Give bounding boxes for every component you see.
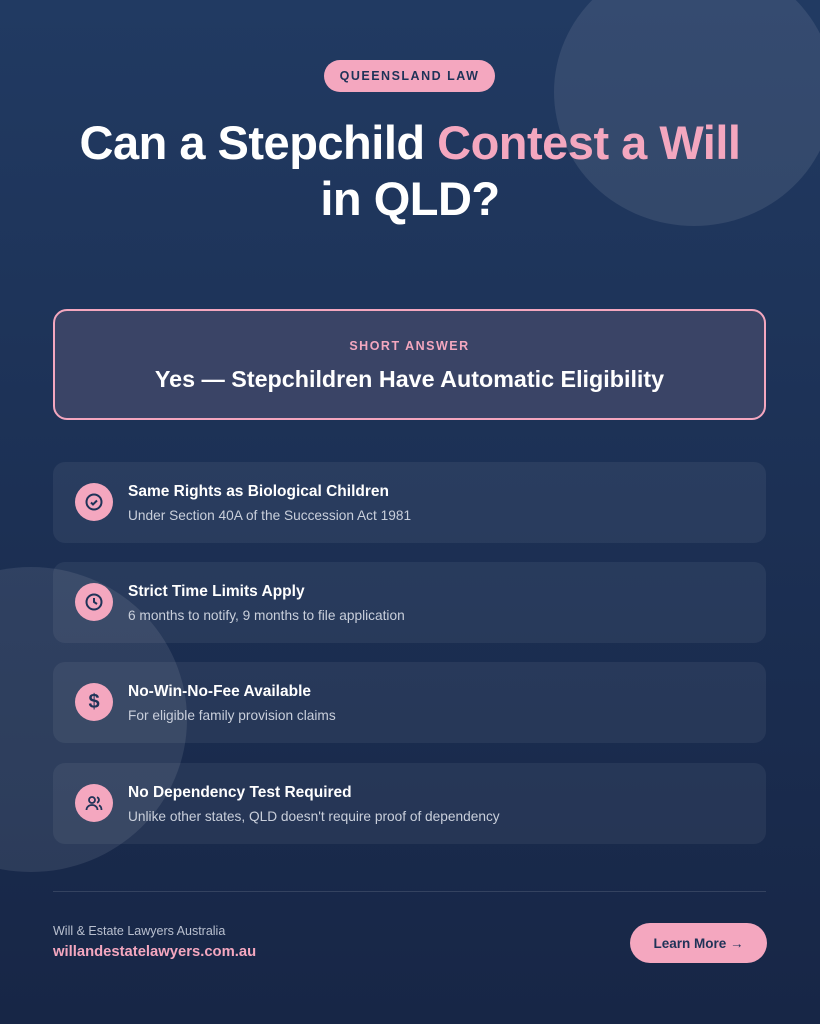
icon: dollar bbox=[75, 683, 113, 721]
card: time limits bbox=[53, 562, 766, 643]
footer: company: Will & Estate Lawyers Australia bbox=[53, 924, 225, 938]
icon: dollar: $ bbox=[88, 690, 100, 712]
button: learn more: Learn More → bbox=[653, 936, 744, 950]
card: no dependency: No Dependency Test Required bbox=[128, 784, 352, 801]
button: learn more bbox=[630, 923, 767, 963]
card: no dependency bbox=[53, 763, 766, 844]
card: time limits: 6 months to notify, 9 months to file application bbox=[128, 608, 405, 623]
card: time limits: Strict Time Limits Apply bbox=[128, 583, 305, 600]
card: same rights: Same Rights as Biological Children bbox=[128, 483, 389, 500]
card: no win no fee bbox=[53, 662, 766, 743]
panel: short answer bbox=[53, 309, 766, 420]
icon: check bbox=[75, 483, 113, 521]
answer text: Yes — Stepchildren Have Automatic Eligibility bbox=[155, 366, 664, 392]
tag: queensland law bbox=[324, 60, 495, 92]
title bbox=[80, 116, 740, 225]
card: no win no fee: For eligible family provision claims bbox=[128, 708, 336, 723]
icon: people bbox=[75, 784, 113, 822]
card: no win no fee: No-Win-No-Fee Available bbox=[128, 683, 311, 700]
footer: url: willandestatelawyers.com.au bbox=[53, 944, 256, 960]
tag: queensland law: QUEENSLAND LAW bbox=[340, 69, 479, 83]
card: no dependency: Unlike other states, QLD doesn't require proof of dependency bbox=[128, 809, 500, 824]
card: same rights: Under Section 40A of the Succession Act 1981 bbox=[128, 508, 411, 523]
title: in QLD? bbox=[320, 172, 500, 225]
icon: clock bbox=[75, 583, 113, 621]
label: short answer: SHORT ANSWER bbox=[349, 339, 470, 353]
card: same rights bbox=[53, 462, 766, 543]
title: Can a Stepchild Contest a Will bbox=[80, 116, 740, 169]
